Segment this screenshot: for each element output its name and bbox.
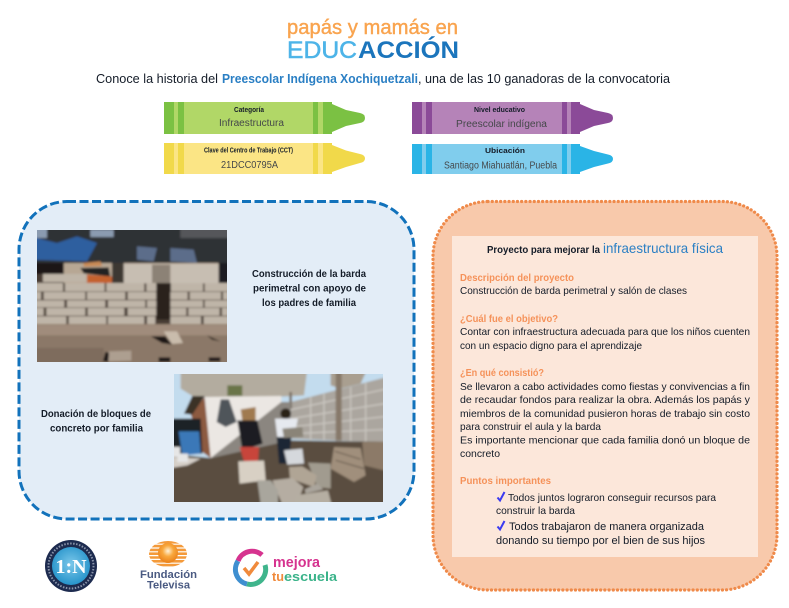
section: objetivo	[460, 314, 750, 352]
crayon: Nivel educativo	[412, 102, 613, 134]
section: en qué consistió: Es importante mencionar que cada familia donó un bloque de	[460, 436, 750, 446]
crayon: Clave del Centro de Trabajo: Clave del Centro de Trabajo (CCT)	[204, 148, 293, 154]
section: puntos importantes: Todos trabajaron de manera organizada	[509, 521, 705, 533]
caption: block donation: concreto por familia	[50, 424, 143, 434]
photo: families donating concrete blocks	[174, 374, 383, 502]
crayon: Nivel educativo: Preescolar indígena	[456, 119, 547, 130]
section: puntos importantes: construir la barda	[496, 506, 575, 517]
heading	[487, 240, 723, 256]
crayon: Nivel educativo: Nivel educativo	[474, 107, 525, 114]
panel: photos	[19, 202, 414, 519]
logo: Fundación Televisa: Fundación	[140, 569, 197, 581]
logo: papás y mamás en EDUCACCIÓN: papás y mamás en	[287, 17, 458, 39]
logo: mejora tu escuela: escuela	[284, 569, 338, 584]
heading: infraestructura física	[603, 240, 723, 256]
section: objetivo: Contar con infraestructura adecuada para que los niños cuenten	[460, 327, 750, 338]
logo: 1:N: 1:N	[55, 556, 87, 578]
section: puntos importantes: Puntos importantes	[460, 476, 551, 487]
logo: papás y mamás en EDUCACCIÓN: ACCIÓN	[358, 36, 459, 64]
section: puntos importantes	[460, 476, 716, 547]
subtitle: , una de las 10 ganadoras de la convocatoria	[418, 72, 670, 86]
crayon: Categoría: Categoría	[234, 107, 264, 114]
section: descripción	[460, 273, 687, 297]
logo: 1:N	[45, 540, 97, 592]
section: puntos importantes: Todos juntos lograron conseguir recursos para	[508, 493, 716, 504]
section: en qué consistió: miembros de la comunidad pusieron horas de trabajo sin costo	[460, 409, 750, 420]
caption: wall construction: los padres de familia	[262, 298, 356, 309]
section: descripción: Construcción de barda perimetral y salón de clases	[460, 286, 687, 297]
logo: mejora tu escuela	[235, 551, 338, 584]
logo: papás y mamás en EDUCACCIÓN: EDUC	[287, 37, 357, 64]
section: en qué consistió: Se llevaron a cabo actividades como fiestas y convivencias a fin	[460, 382, 750, 393]
crayon: Ubicación: Santiago Miahuatlán, Puebla	[444, 160, 557, 172]
caption: wall construction: perimetral con apoyo de	[253, 284, 366, 294]
crayon: Ubicación: Ubicación	[485, 148, 525, 155]
caption: wall construction: Construcción de la barda	[252, 269, 366, 280]
section: descripción: Descripción del proyecto	[460, 273, 574, 284]
subtitle: Preescolar Indígena Xochiquetzali	[222, 72, 418, 86]
logo: papás y mamás en EDUCACCIÓN	[287, 17, 459, 64]
crayon: Categoría	[164, 102, 365, 134]
section: en qué consistió: concreto	[460, 449, 500, 460]
subtitle	[96, 72, 670, 86]
crayon: Clave del Centro de Trabajo	[164, 143, 365, 174]
section: puntos importantes: donando su tiempo por el bien de sus hijos	[496, 535, 705, 547]
section: en qué consistió	[460, 368, 751, 460]
logo: mejora tu escuela: tu	[272, 569, 284, 584]
section: objetivo: ¿Cuál fue el objetivo?	[460, 314, 558, 325]
logo: Fundación Televisa: Televisa	[147, 580, 191, 592]
photo: wall under construction	[37, 230, 227, 362]
section: objetivo: con un espacio digno para el aprendizaje	[460, 341, 642, 352]
heading: Proyecto para mejorar la	[487, 244, 600, 256]
crayon: Categoría: Infraestructura	[219, 118, 284, 129]
crayon: Ubicación	[412, 144, 613, 174]
section: en qué consistió: para construir el aula y la barda	[460, 422, 601, 433]
subtitle: Conoce la historia del	[96, 72, 218, 86]
caption: block donation	[41, 409, 151, 434]
caption: block donation: Donación de bloques de	[41, 409, 151, 420]
logo: mejora tu escuela: mejora	[273, 554, 321, 571]
caption: wall construction	[252, 269, 366, 309]
panel: project details	[433, 202, 777, 590]
section: en qué consistió: ¿En qué consistió?	[460, 368, 544, 379]
section: en qué consistió: de recaudar fondos para realizar la obra. Además los papás y	[460, 395, 751, 406]
logo: Fundación Televisa	[140, 541, 197, 592]
crayon: Clave del Centro de Trabajo: 21DCC0795A	[221, 160, 278, 171]
